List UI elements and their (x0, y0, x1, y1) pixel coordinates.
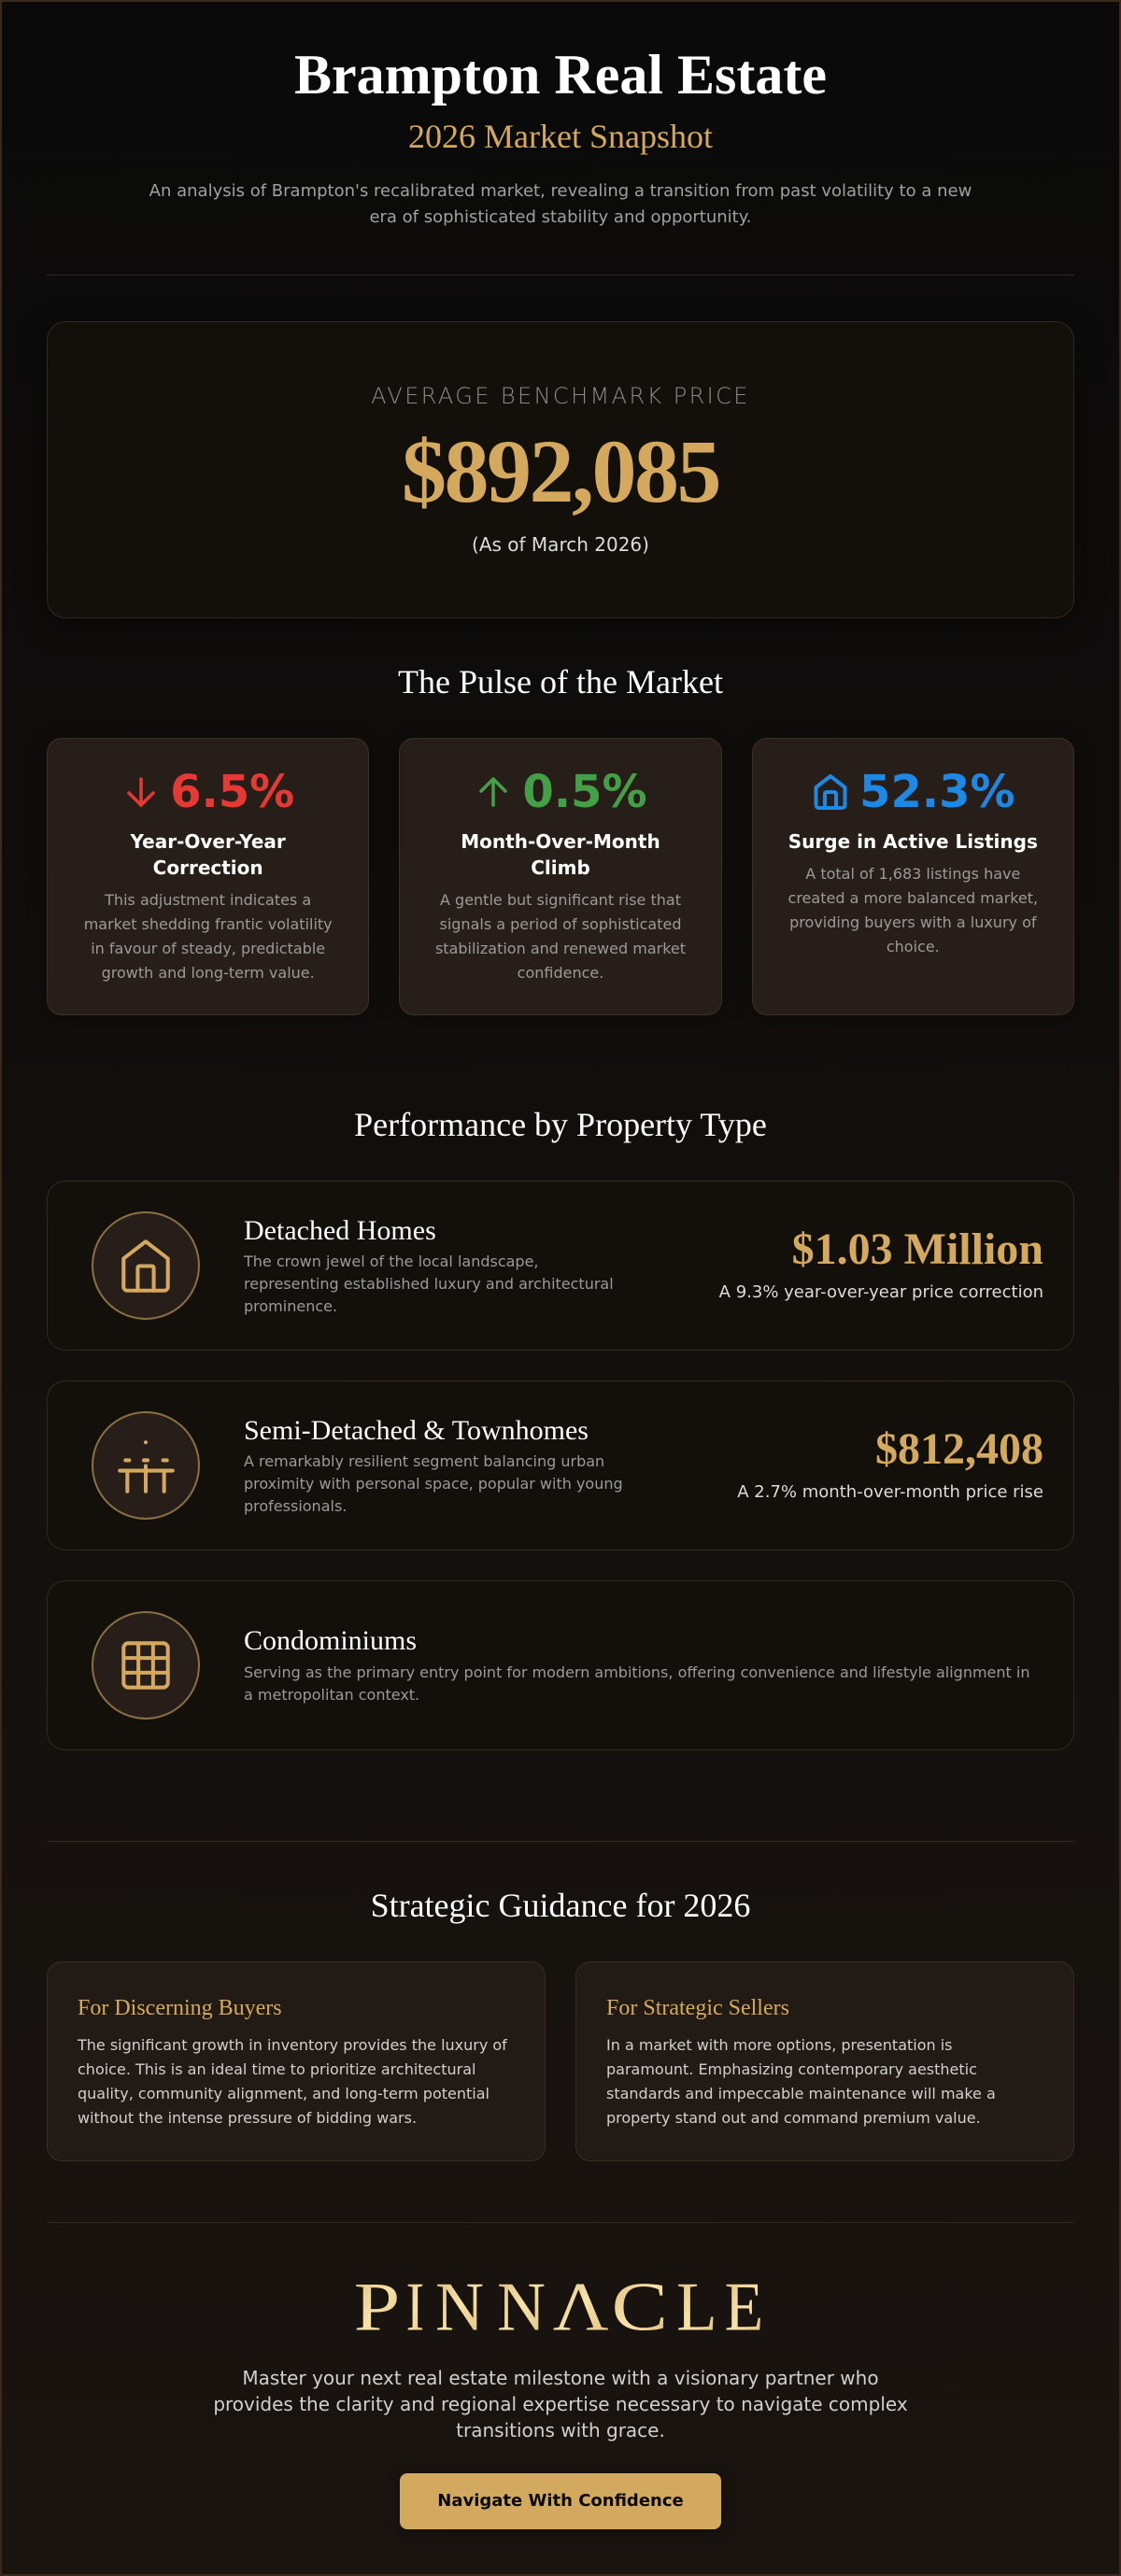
stat description: A gentle but significant rise that (440, 891, 681, 909)
guidance text (606, 2036, 996, 2127)
panel: year-over-year stat (47, 738, 369, 1015)
intro text: An analysis of Brampton's recalibrated market, revealing a transition from past volatility to a new (149, 181, 972, 201)
guidance text: without the intense pressure of bidding wars. (78, 2109, 417, 2127)
stat description: providing buyers with a luxury of (789, 913, 1037, 931)
property description: a metropolitan context. (244, 1686, 419, 1704)
stat title: Year-Over-Year (131, 830, 286, 853)
panel: condominiums (47, 1580, 1074, 1750)
panel: detached homes (47, 1181, 1074, 1351)
stat description: signals a period of sophisticated (439, 915, 681, 933)
stat value: 52.3%: 52.3% (859, 766, 1015, 818)
stat title: Correction (153, 856, 263, 879)
guidance text (77, 2036, 508, 2127)
intro text (149, 181, 972, 227)
guidance title: For Strategic Sellers (606, 1996, 789, 2020)
subtitle: 2026 Market Snapshot (408, 118, 713, 155)
stat title (461, 830, 660, 879)
property name: Semi-Detached & Townhomes (244, 1415, 589, 1446)
stat description (435, 891, 686, 982)
stat value: 6.5%: 6.5% (170, 766, 294, 818)
property description: A remarkably resilient segment balancing urban (244, 1452, 604, 1470)
property change: A 2.7% month-over-month price rise (737, 1482, 1043, 1502)
closing text: Master your next real estate milestone with a visionary partner who (242, 2367, 879, 2389)
guidance text: paramount. Emphasizing contemporary aesthetic (606, 2060, 977, 2078)
property price: $1.03 Million (792, 1224, 1043, 1274)
property description: professionals. (244, 1497, 347, 1515)
guidance text: In a market with more options, presentation is (606, 2036, 953, 2054)
stat description (84, 891, 333, 982)
stat title: Month-Over-Month (461, 830, 660, 853)
panel: buyers guidance (47, 1961, 546, 2161)
benchmark date: (As of March 2026) (472, 533, 649, 556)
panel: semi-detached and townhomes (47, 1380, 1074, 1550)
property description: representing established luxury and architectural (244, 1275, 614, 1293)
heading: pulse of the market: The Pulse of the Market (398, 663, 723, 701)
stat description: stabilization and renewed market (435, 940, 686, 957)
property description (244, 1452, 623, 1515)
closing text (213, 2367, 908, 2442)
guidance title: For Discerning Buyers (78, 1996, 282, 2020)
panel: average benchmark price (47, 321, 1074, 618)
icon: house (92, 1211, 200, 1320)
property description: prominence. (244, 1297, 337, 1315)
property description (243, 1253, 614, 1315)
guidance text: The significant growth in inventory provides the luxury of (78, 2036, 507, 2054)
stat description: confidence. (518, 964, 603, 982)
benchmark label: AVERAGE BENCHMARK PRICE (371, 383, 750, 409)
stat description: choice. (887, 938, 940, 955)
benchmark price: $892,085 (402, 421, 719, 521)
panel: active listings stat (752, 738, 1074, 1015)
guidance text: quality, community alignment, and long-term potential (78, 2085, 490, 2102)
panel: month-over-month stat (399, 738, 722, 1015)
closing text: transitions with grace. (456, 2419, 665, 2442)
guidance text: property stand out and command premium value. (606, 2109, 981, 2127)
stat title (130, 830, 286, 879)
logo: Pinnacle (354, 2272, 763, 2342)
stat description: market shedding frantic volatility (84, 915, 333, 933)
heading: performance by property type: Performance by Property Type (354, 1106, 767, 1143)
guidance text: standards and impeccable maintenance will make a (606, 2085, 996, 2102)
button: navigate with confidence (400, 2473, 721, 2529)
title: Brampton Real Estate (294, 44, 827, 106)
property name: Detached Homes (244, 1215, 436, 1246)
stat description: This adjustment indicates a (105, 891, 311, 909)
property description (244, 1663, 1029, 1704)
property change: A 9.3% year-over-year price correction (719, 1282, 1043, 1302)
property price: $812,408 (875, 1424, 1043, 1474)
heading: strategic guidance: Strategic Guidance for 2026 (371, 1887, 750, 1924)
property description: proximity with personal space, popular with young (244, 1475, 623, 1493)
closing text: provides the clarity and regional expertise necessary to navigate complex (213, 2393, 908, 2415)
property description: The crown jewel of the local landscape, (244, 1253, 539, 1270)
stat value: 0.5%: 0.5% (522, 766, 647, 818)
panel: sellers guidance (575, 1961, 1074, 2161)
intro text: era of sophisticated stability and opportunity. (369, 207, 752, 227)
stat description: A total of 1,683 listings have (805, 865, 1020, 883)
stat description: in favour of steady, predictable (91, 940, 325, 957)
icon: condo grid (92, 1611, 200, 1720)
guidance text: choice. This is an ideal time to prioritize architectural (78, 2060, 475, 2078)
stat title: Surge in Active Listings (788, 830, 1038, 853)
stat description: created a more balanced market, (788, 889, 1038, 907)
stat description: growth and long-term value. (102, 964, 315, 982)
icon: townhomes (92, 1411, 200, 1520)
property description: Serving as the primary entry point for modern ambitions, offering convenience and lifestyle alignment in (244, 1663, 1029, 1681)
property name: Condominiums (244, 1625, 417, 1656)
stat description (788, 865, 1038, 955)
button: navigate with confidence: Navigate With Confidence (437, 2491, 684, 2511)
stat title: Climb (531, 856, 590, 879)
